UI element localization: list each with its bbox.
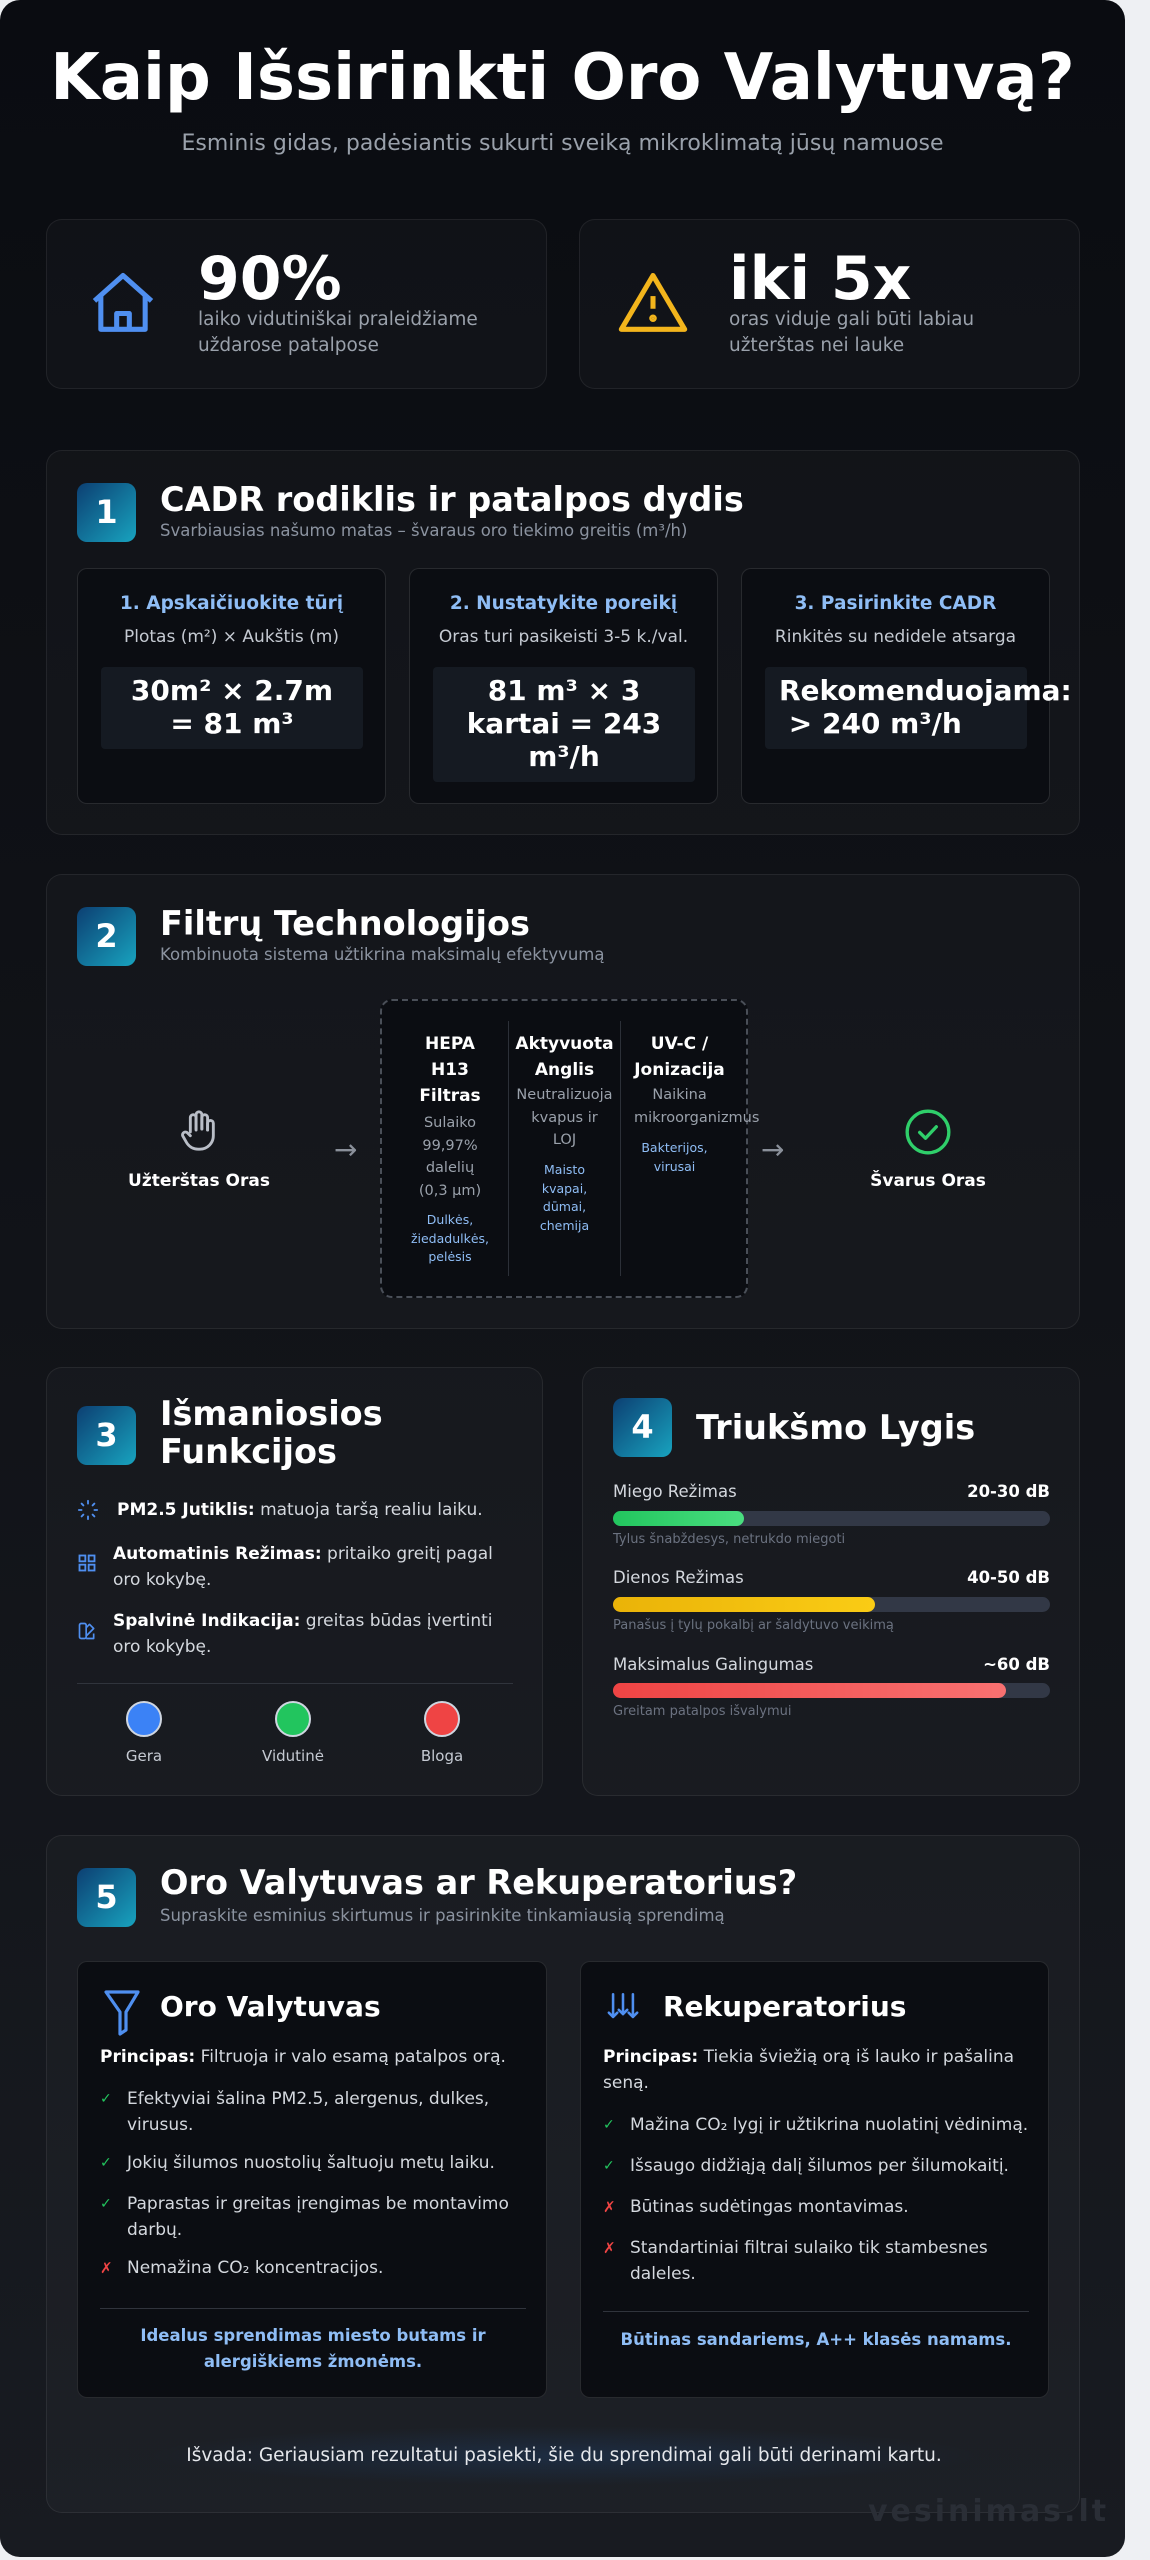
filter stack box: Naikina: [652, 1087, 707, 1103]
card: recuperator: Rekuperatorius: [663, 1990, 906, 2023]
card: recuperator: Būtinas sandariems, A++ klasės namams.: [621, 2330, 1011, 2349]
heading 1: CADR rodiklis ir patalpos dydis: [160, 480, 744, 519]
filter stack box: Bakterijos,: [641, 1140, 708, 1155]
badge 4: 4: [631, 1408, 654, 1446]
card: air purifier: Idealus sprendimas miesto butams ir: [140, 2326, 486, 2345]
panel: section 5 comparison: [46, 1835, 1080, 2513]
card: recuperator: Standartiniai filtrai sulaiko tik stambesnes daleles.: [630, 2238, 988, 2284]
stat text: oras viduje gali būti labiau: [729, 309, 974, 330]
step card 1: = 81 m³: [170, 707, 294, 740]
heading 3: [160, 1394, 383, 1471]
filter stack box: dūmai,: [543, 1199, 586, 1214]
filter stack box: Sulaiko: [424, 1115, 476, 1131]
card: recuperator: Principas: Tiekia šviežią orą iš lauko ir pašalina seną.: [603, 2047, 1014, 2093]
feature: color indication: oro kokybę.: [113, 1637, 211, 1657]
stat text: [729, 309, 974, 356]
badge 1: [77, 483, 136, 542]
filter: UV-C: UV-C /: [651, 1034, 708, 1054]
noise bar: max: Maksimalus Galingumas: [613, 1655, 813, 1674]
card: air purifier: Principas: Filtruoja ir valo esamą patalpos orą.: [100, 2047, 506, 2067]
noise bar: day: 40-50 dB: [967, 1568, 1050, 1587]
card: recuperator: [580, 1961, 1049, 2398]
card: air purifier: Paprastas ir greitas įrengimas be montavimo darbų.: [127, 2194, 509, 2240]
filter stack box: 99,97%: [422, 1138, 478, 1154]
filter stack box: žiedadulkės,: [411, 1230, 489, 1246]
card: recuperator: ✓: [603, 2158, 615, 2174]
noise bar: day: [613, 1568, 1050, 1633]
filter stack box: kvapai,: [542, 1180, 587, 1196]
legend: air quality colors: Gera: [126, 1747, 162, 1765]
step card 2: kartai = 243: [467, 707, 661, 740]
filter stack box: kvapus ir: [531, 1110, 598, 1126]
label: clean air: Švarus Oras: [870, 1171, 986, 1191]
noise bar: sleep: 20-30 dB: [967, 1482, 1050, 1501]
noise bar: day: Dienos Režimas: [613, 1568, 744, 1587]
subheading 2: Kombinuota sistema užtikrina maksimalų efektyvumą: [160, 945, 604, 964]
filter stack box: (0,3 µm): [419, 1182, 481, 1198]
step card 1: [77, 568, 386, 804]
stat card: 5x: [579, 219, 1080, 389]
stat text: uždarose patalpose: [198, 335, 379, 356]
noise bar: max: ~60 dB: [983, 1655, 1050, 1674]
legend: air quality colors: Bloga: [421, 1747, 463, 1765]
arrow 2: →: [761, 1133, 784, 1166]
card: air purifier: Oro Valytuvas: [160, 1990, 381, 2023]
title: Kaip Išsirinkti Oro Valytuvą?: [50, 41, 1075, 115]
stat number: iki 5x: [729, 244, 911, 314]
filter: HEPA: Filtras: [419, 1086, 481, 1106]
stat text: užterštas nei lauke: [729, 335, 904, 356]
subheading 1: Svarbiausias našumo matas – švaraus oro tiekimo greitis (m³/h): [160, 521, 687, 540]
conclusion: Išvada: Geriausiam rezultatui pasiekti, šie du sprendimai gali būti derinami kartu.: [186, 2445, 942, 2466]
step card 1: 30m² × 2.7m: [131, 674, 333, 707]
icon: warning: [618, 273, 688, 332]
icon: funnel: [104, 1990, 140, 2036]
panel: section 2 filters: [46, 874, 1080, 1329]
stat text: [198, 309, 478, 356]
filter: UV-C: [633, 1034, 725, 1080]
filter: HEPA: H13: [431, 1060, 469, 1080]
filter: carbon: Anglis: [535, 1060, 594, 1080]
step card 1: Plotas (m²) × Aukštis (m): [124, 627, 339, 647]
label: polluted air: Užterštas Oras: [128, 1171, 270, 1191]
step card 2: m³/h: [528, 740, 600, 773]
subheading 5: Supraskite esminius skirtumus ir pasirinkite tinkamiausią sprendimą: [160, 1906, 725, 1925]
step card 2: [409, 568, 718, 804]
filter stack box: chemija: [540, 1218, 589, 1232]
card: recuperator: ✗: [603, 2198, 616, 2216]
feature: PM2.5: PM2.5 Jutiklis: matuoja taršą realiu laiku.: [117, 1500, 483, 1520]
stat card: 90%: [46, 219, 547, 389]
filter stack box: Maisto: [544, 1162, 585, 1177]
filter stack box: virusai: [654, 1158, 695, 1174]
filter: carbon: [515, 1034, 614, 1080]
heading 3: Išmaniosios: [160, 1394, 383, 1433]
badge 3: [77, 1406, 136, 1465]
heading 2: Filtrų Technologijos: [160, 904, 530, 943]
panel: section 4 noise: [582, 1367, 1080, 1796]
card: air purifier: [77, 1961, 547, 2398]
step card 2: Oras turi pasikeisti 3-5 k./val.: [439, 627, 688, 647]
card: air purifier: ✓: [100, 2155, 112, 2171]
noise bar: max: [613, 1655, 1050, 1719]
feature: color indication: Spalvinė Indikacija: greitas būdas įvertinti: [113, 1611, 493, 1631]
card: recuperator: Būtinas sudėtingas montavimas.: [630, 2197, 909, 2217]
card: recuperator: Mažina CO₂ lygį ir užtikrina nuolatinį vėdinimą.: [630, 2115, 1028, 2135]
icon: hand: [181, 1110, 215, 1151]
icon: airflow arrows: [608, 1993, 638, 2018]
legend: air quality colors: Vidutinė: [262, 1747, 324, 1765]
card: recuperator: ✗: [603, 2239, 616, 2257]
badge 4: [613, 1398, 672, 1457]
step card 3: 3. Pasirinkite CADR: [795, 593, 996, 614]
filter stack box: Neutralizuoja: [516, 1087, 613, 1103]
badge 2: 2: [95, 917, 118, 955]
panel: section 3 smart features: [46, 1367, 543, 1796]
stat number: 90%: [198, 244, 342, 314]
filter: HEPA: HEPA: [425, 1034, 475, 1054]
filter stack box: Dulkės,: [427, 1212, 473, 1227]
step card 3: [741, 568, 1050, 804]
feature: auto mode: Automatinis Režimas: pritaiko greitį pagal: [113, 1544, 493, 1564]
badge 5: 5: [95, 1878, 118, 1916]
legend: air quality colors: [126, 1701, 463, 1765]
heading 3: Funkcijos: [160, 1432, 337, 1471]
watermark: vesinimas.lt: [868, 2494, 1109, 2529]
card: recuperator: ✓: [603, 2117, 615, 2133]
filter: UV-C: Jonizacija: [634, 1060, 725, 1080]
step card 2: 81 m³ × 3: [488, 674, 640, 707]
feature: color indication: [78, 1611, 493, 1657]
filter: HEPA: [419, 1034, 481, 1106]
noise bar: sleep: Tylus šnabždesys, netrukdo miegoti: [613, 1532, 845, 1547]
card: air purifier: ✓: [100, 2196, 112, 2212]
panel: section 1 CADR: [46, 450, 1080, 835]
card: air purifier: Efektyviai šalina PM2.5, alergenus, dulkes, virusus.: [127, 2089, 489, 2135]
feature: auto mode: [78, 1544, 493, 1590]
filter stack box: [380, 999, 748, 1298]
filter stack box: mikroorganizmus: [634, 1110, 759, 1126]
badge 3: 3: [95, 1416, 118, 1454]
conclusion: [147, 2426, 981, 2486]
noise bar: day: Panašus į tylų pokalbį ar šaldytuvo veikimą: [613, 1618, 894, 1633]
card: air purifier: ✗: [100, 2259, 113, 2277]
heading 5: Oro Valytuvas ar Rekuperatorius?: [160, 1863, 797, 1902]
filter stack box: pelėsis: [428, 1249, 472, 1264]
card: air purifier: ✓: [100, 2091, 112, 2107]
card: air purifier: Jokių šilumos nuostolių šaltuoju metų laiku.: [127, 2153, 495, 2173]
card: air purifier: alergiškiems žmonėms.: [204, 2352, 422, 2371]
icon: house: [92, 272, 154, 332]
arrow 1: →: [334, 1133, 357, 1166]
feature: auto mode: oro kokybę.: [113, 1570, 211, 1590]
filter: carbon: Aktyvuota: [515, 1034, 614, 1054]
step card 3: Rekomenduojama:: [779, 674, 1072, 707]
step card 2: 2. Nustatykite poreikį: [450, 593, 677, 614]
step card 1: 1. Apskaičiuokite tūrį: [120, 593, 343, 614]
badge 5: [77, 1868, 136, 1927]
noise bar: max: Greitam patalpos išvalymui: [613, 1704, 791, 1719]
badge 2: [77, 907, 136, 966]
filter stack box: LOJ: [553, 1132, 576, 1148]
heading 4: Triukšmo Lygis: [696, 1408, 975, 1447]
card: recuperator: Išsaugo didžiąją dalį šilumos per šilumokaitį.: [630, 2156, 1009, 2176]
step card 3: > 240 m³/h: [789, 707, 962, 740]
subtitle: Esminis gidas, padėsiantis sukurti sveiką mikroklimatą jūsų namuose: [181, 131, 944, 156]
step card 3: Rinkitės su nedidele atsarga: [775, 627, 1016, 647]
stat text: laiko vidutiniškai praleidžiame: [198, 309, 478, 330]
noise bar: sleep: Miego Režimas: [613, 1482, 737, 1501]
icon: check circle: [906, 1110, 950, 1154]
filter stack box: dalelių: [426, 1160, 474, 1176]
noise bar: sleep: [613, 1482, 1050, 1547]
card: air purifier: Nemažina CO₂ koncentracijos.: [127, 2258, 383, 2278]
badge 1: 1: [95, 493, 118, 531]
